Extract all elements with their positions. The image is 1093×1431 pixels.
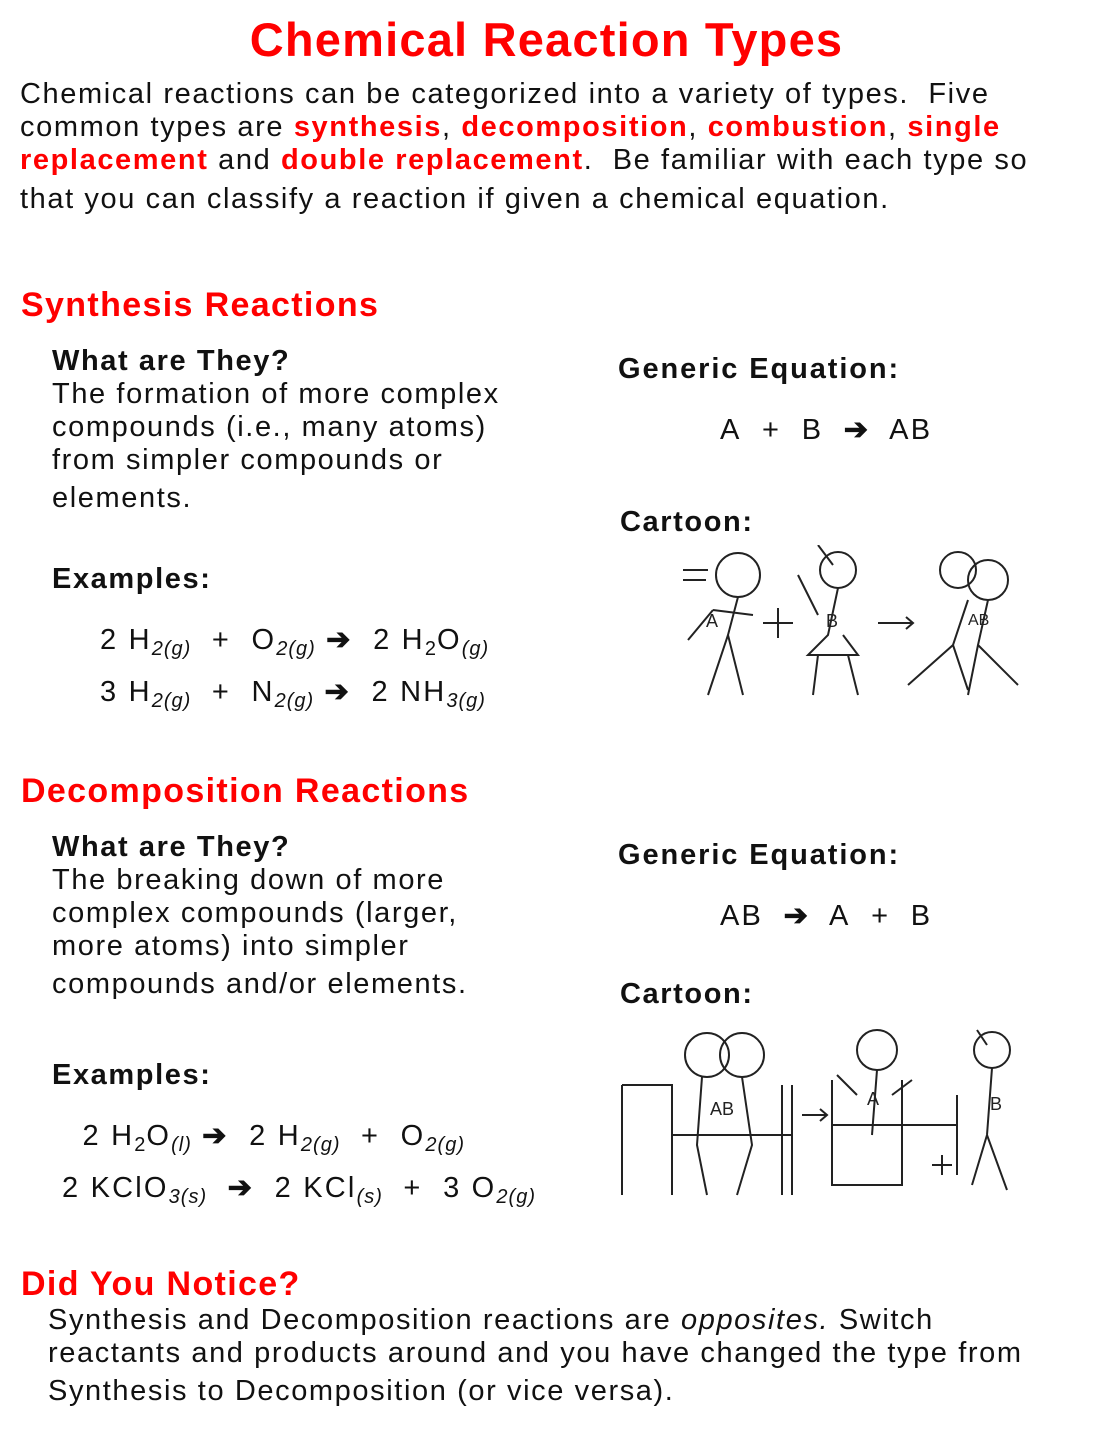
text: did you notice bbox=[48, 1304, 1023, 1407]
text: decomposition what are they bbox=[52, 831, 468, 1000]
text: synthesis what are they: The formation of more complex bbox=[52, 378, 500, 410]
text: synthesis what are they: compounds (i.e., many atoms) bbox=[52, 411, 487, 443]
text: did you notice: reactants and products around and you have changed the type from bbox=[48, 1337, 1023, 1369]
text: synthesis what are they: elements. bbox=[52, 482, 192, 514]
intro text: replacement and double replacement. Be familiar with each type so bbox=[20, 144, 1028, 176]
label: cartoon synthesis: Cartoon: bbox=[620, 506, 754, 538]
title: Chemical Reaction Types bbox=[250, 13, 843, 66]
intro text bbox=[20, 78, 1028, 215]
intro text: common types are synthesis, decomposition, combustion, single bbox=[20, 111, 1001, 143]
heading: synthesis: Synthesis Reactions bbox=[21, 286, 379, 324]
equations: decomposition examples: 2 H2O(l) ➔ 2 H2(g) + O2(g) bbox=[82, 1120, 465, 1156]
cartoon: decomposition: A bbox=[867, 1089, 879, 1109]
equations: synthesis examples bbox=[100, 624, 489, 712]
equation: synthesis: A + B ➔ AB bbox=[720, 414, 932, 446]
text: decomposition what are they: more atoms) into simpler bbox=[52, 930, 410, 962]
equations: synthesis examples: 2 H2(g) + O2(g) ➔ 2 H2O(g) bbox=[100, 624, 489, 660]
label: examples synthesis: Examples: bbox=[52, 563, 211, 595]
text: synthesis what are they bbox=[52, 345, 500, 514]
text: synthesis what are they: What are They? bbox=[52, 345, 290, 377]
text: did you notice: Synthesis and Decomposition reactions are opposites. Switch bbox=[48, 1304, 934, 1336]
label: generic equation decomposition: Generic Equation: bbox=[618, 839, 900, 871]
label: examples decomposition: Examples: bbox=[52, 1059, 211, 1091]
text: decomposition what are they: compounds and/or elements. bbox=[52, 968, 468, 1000]
intro text: that you can classify a reaction if given a chemical equation. bbox=[20, 183, 890, 215]
intro text: Chemical reactions can be categorized into a variety of types. Five bbox=[20, 78, 990, 110]
equation: decomposition: AB ➔ A + B bbox=[720, 900, 932, 932]
label: generic equation synthesis: Generic Equation: bbox=[618, 353, 900, 385]
heading: did you notice: Did You Notice? bbox=[21, 1265, 301, 1303]
text: synthesis what are they: from simpler compounds or bbox=[52, 444, 443, 476]
cartoon: synthesis: A bbox=[706, 611, 718, 631]
cartoon: decomposition: B bbox=[990, 1094, 1002, 1114]
equations: decomposition examples bbox=[62, 1120, 536, 1208]
text: decomposition what are they: What are They? bbox=[52, 831, 290, 863]
cartoon: synthesis: B bbox=[826, 611, 838, 631]
equations: decomposition examples: 2 KClO3(s) ➔ 2 KCl(s) + 3 O2(g) bbox=[62, 1172, 536, 1208]
text: decomposition what are they: complex compounds (larger, bbox=[52, 897, 458, 929]
equations: synthesis examples: 3 H2(g) + N2(g) ➔ 2 NH3(g) bbox=[100, 676, 486, 712]
text: did you notice: Synthesis to Decomposition (or vice versa). bbox=[48, 1375, 674, 1407]
cartoon: synthesis: AB bbox=[968, 612, 989, 629]
cartoon: decomposition bbox=[621, 1029, 1011, 1196]
label: cartoon decomposition: Cartoon: bbox=[620, 978, 754, 1010]
cartoon: decomposition: AB bbox=[710, 1099, 734, 1119]
cartoon: synthesis bbox=[683, 545, 1019, 696]
text: decomposition what are they: The breaking down of more bbox=[52, 864, 445, 896]
heading: decomposition: Decomposition Reactions bbox=[21, 772, 470, 810]
